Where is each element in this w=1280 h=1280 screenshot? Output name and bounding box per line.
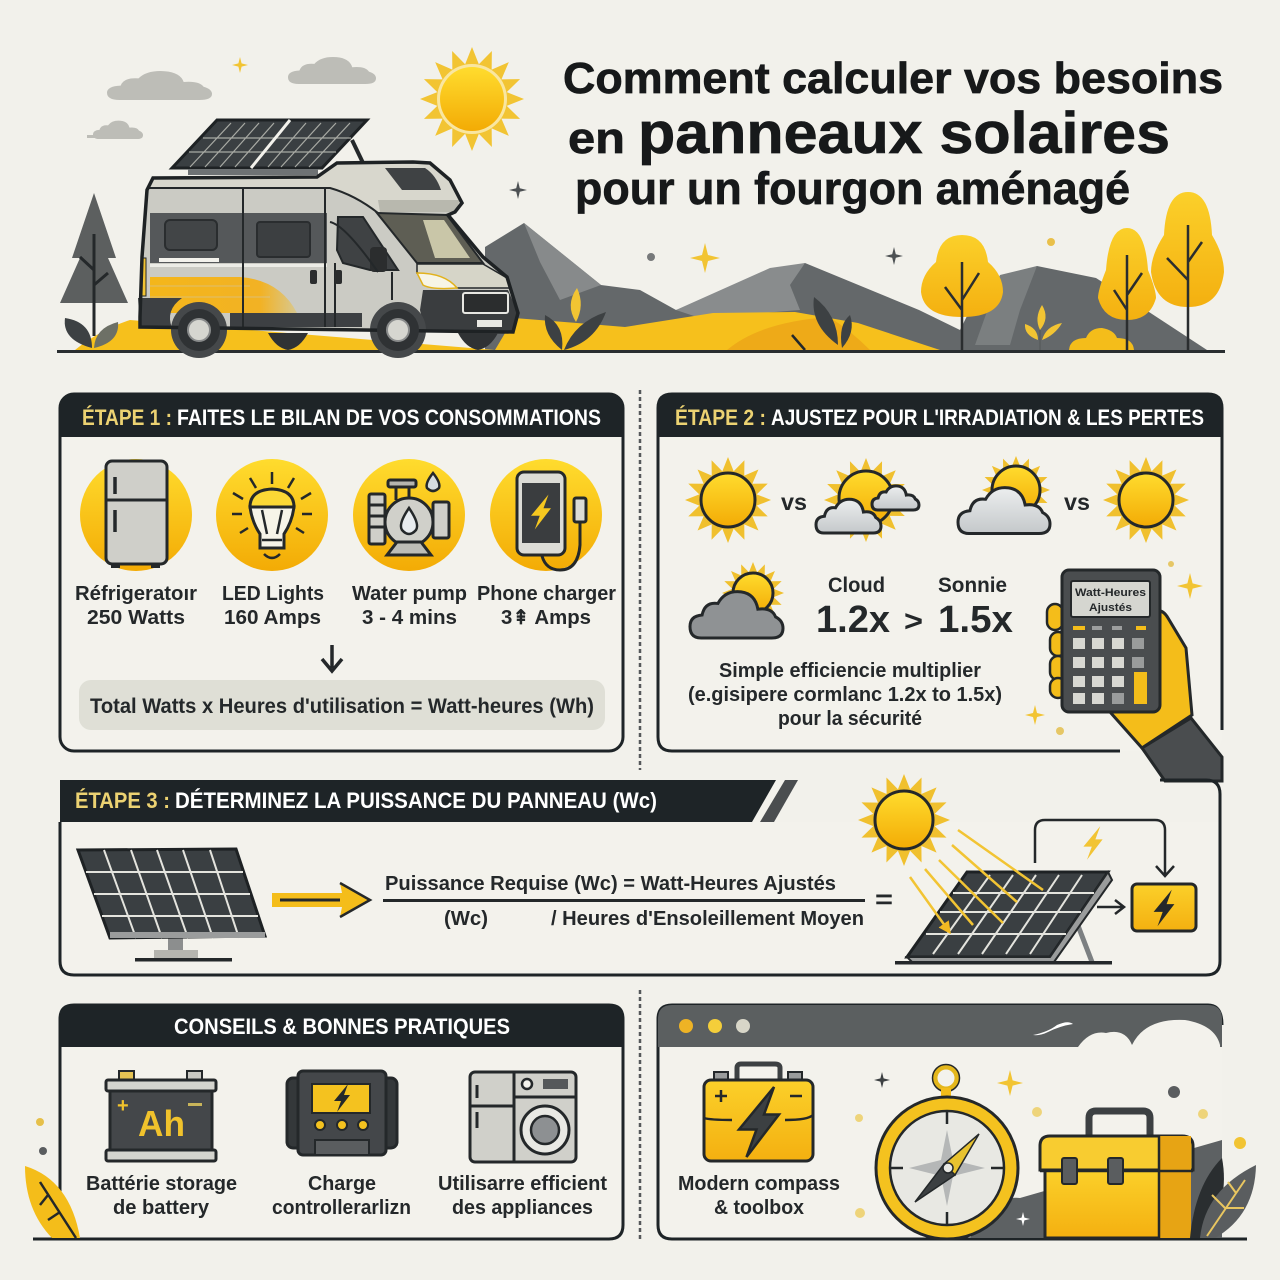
step 2 heading: AJUSTEZ POUR L'IRRADIATION & LES PERTES: [771, 405, 1204, 430]
title: pour un fourgon aménagé: [575, 163, 1130, 214]
cloud vs sun: vs: [1064, 489, 1090, 515]
appliance labels: 250 Watts: [87, 607, 185, 629]
icon: sun: [420, 47, 524, 151]
step 2 heading: ÉTAPE 2 :: [675, 405, 766, 430]
bumper and grille: [420, 290, 518, 332]
icon: toolbox: [1040, 1111, 1193, 1238]
icon: sun shining on panel: [858, 774, 1112, 964]
multipliers: Cloud: [828, 574, 885, 597]
trees: [60, 192, 1224, 350]
icon: refrigerator: [80, 459, 192, 571]
formula: (Wc): [444, 908, 488, 930]
icon: charge controller: [287, 1071, 397, 1155]
icon: hand with calculator: Watt-Heures: [1075, 587, 1146, 599]
formula pill: [79, 680, 605, 730]
formula: [383, 873, 893, 930]
background hill and decorations: [855, 1070, 1246, 1238]
title: panneaux solaires: [638, 101, 1170, 166]
icon: battery: +: [117, 1095, 129, 1117]
panel: compass and toolbox: [658, 1005, 1256, 1239]
appliance labels: Phone charger: [477, 583, 616, 605]
tips heading: CONSEILS & BONNES PRATIQUES: [174, 1014, 510, 1039]
step 1 heading: [60, 394, 623, 437]
connector and battery: [1035, 820, 1196, 931]
roof cap and upper stripes: [147, 163, 462, 213]
compass toolbox label: [678, 1173, 840, 1219]
icon: yellow battery case: [704, 1064, 813, 1161]
appliance labels: Réfrigeratoır: [75, 583, 197, 605]
tips labels: [86, 1173, 607, 1219]
van body: [138, 162, 518, 358]
icon: solar panel on stand: [78, 849, 265, 962]
panel: tips: [25, 1005, 623, 1239]
arrow right: [272, 883, 370, 917]
lower skirts: [138, 298, 182, 328]
leaves: [1190, 1158, 1256, 1238]
step 2 heading: [658, 394, 1222, 437]
windshield and door window: [377, 213, 483, 263]
dotted dividers: [639, 390, 641, 1240]
ground line: [57, 350, 1225, 353]
cloud vs sun: [958, 456, 1189, 543]
formula: Puissance Requise (Wc) = Watt-Heures Ajustés: [385, 873, 836, 895]
title: en: [568, 114, 625, 163]
header cloud and dots: [679, 1019, 1220, 1047]
icon: battery: [106, 1071, 216, 1161]
appliance labels: Water pump: [352, 583, 467, 605]
door lines and handles: [243, 188, 392, 327]
icon: water pump: [353, 459, 465, 571]
icon: hand with calculator: Ajustés: [1089, 602, 1132, 614]
icon: LED bulb: [216, 459, 328, 571]
explanation text: [688, 660, 1002, 730]
formula: / Heures d'Ensoleillement Moyen: [551, 908, 864, 930]
explanation text: pour la sécurité: [778, 708, 922, 730]
appliance labels: 3 - 4 mins: [362, 607, 457, 629]
tips labels: controllerarlizn: [272, 1197, 411, 1219]
step 3 heading: ÉTAPE 3 :: [75, 788, 170, 813]
appliance labels: 160 Amps: [224, 607, 321, 629]
yellow swoosh: [150, 277, 297, 313]
icon: roof solar panel: [172, 120, 367, 175]
title: Comment calculer vos besoins: [563, 54, 1223, 103]
step 3 heading: [60, 780, 798, 822]
multipliers: [816, 574, 1013, 641]
icon: efficient appliances: [470, 1072, 576, 1162]
step 3 heading: DÉTERMINEZ LA PUISSANCE DU PANNEAU (Wc): [175, 788, 657, 813]
formula: =: [875, 884, 893, 914]
compass toolbox label: Modern compass: [678, 1173, 840, 1195]
multipliers: 1.2x: [816, 599, 890, 641]
appliance labels: [75, 583, 616, 629]
tips labels: Battérie storage: [86, 1173, 237, 1195]
appliance labels: LED Lights: [222, 583, 324, 605]
explanation text: (e.gisipere cormlanc 1.2x to 1.5x): [688, 684, 1002, 706]
icon: phone charger: [490, 459, 602, 571]
panel: step 2: [658, 394, 1222, 781]
multipliers: Sonnie: [938, 574, 1007, 597]
tips labels: des appliances: [452, 1197, 593, 1219]
yellow hills: [75, 312, 1134, 350]
tips heading: [60, 1005, 623, 1047]
tips labels: Charge: [308, 1173, 376, 1195]
clouds and sparkles: [87, 57, 1055, 273]
icon: yellow leaf and dots: [25, 1118, 80, 1238]
step 1 heading: ÉTAPE 1 :: [82, 405, 172, 430]
explanation text: Simple efficiencie multiplier: [719, 660, 981, 682]
compass toolbox label: & toolbox: [714, 1197, 804, 1219]
dark cloud with sun: [690, 562, 784, 638]
multipliers: >: [904, 605, 923, 638]
leaves: [65, 288, 1062, 350]
formula pill: Total Watts x Heures d'utilisation = Watt-heures (Wh): [90, 695, 594, 718]
title: [563, 54, 1223, 214]
icon: compass: [876, 1064, 1018, 1239]
arrow down: [322, 645, 342, 671]
sun vs sun and clouds: vs: [781, 489, 807, 515]
panel: step 3: [60, 774, 1220, 975]
icon: battery: Ah: [138, 1103, 185, 1144]
appliance labels: 3⇞ Amps: [501, 607, 591, 629]
hood: [417, 264, 510, 288]
van wheels: [178, 309, 498, 351]
hero illustration: landscape and van: [57, 47, 1225, 358]
window band: [150, 213, 327, 263]
sun vs sun and clouds: [685, 457, 919, 543]
mountains: [485, 223, 1207, 350]
step 1 heading: FAITES LE BILAN DE VOS CONSOMMATIONS: [177, 405, 601, 430]
tips labels: Utilisarre efficient: [438, 1173, 607, 1195]
icon: hand with calculator: [1025, 561, 1222, 781]
tips labels: de battery: [113, 1197, 210, 1219]
multipliers: 1.5x: [938, 599, 1013, 641]
panel: step 1: [60, 394, 623, 751]
